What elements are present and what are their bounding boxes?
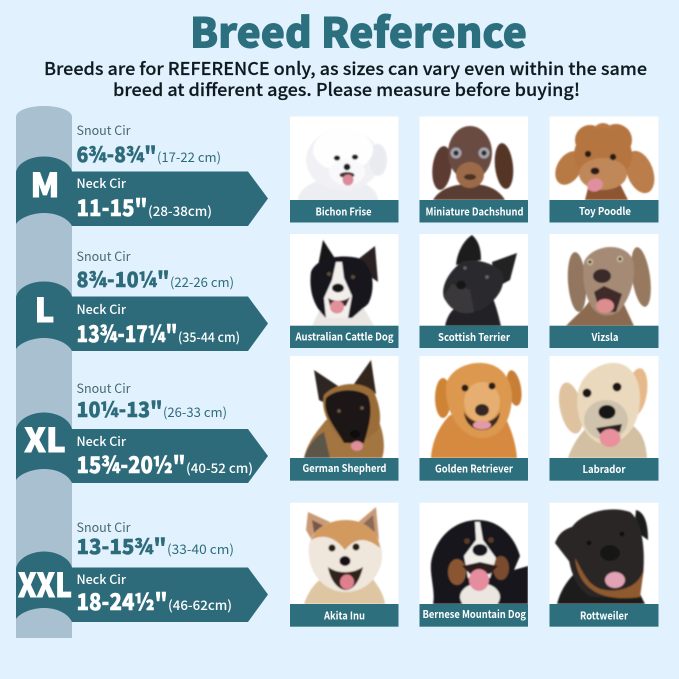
card: Golden Retriever (420, 356, 528, 481)
XL badge letter: XL (24, 414, 66, 462)
XL neck measurement (76, 431, 253, 480)
L size badge and neck arrow (16, 282, 268, 351)
M neck measurement: 11-15" (76, 189, 148, 223)
subtitle: Breeds are for REFERENCE only, as sizes can vary even within the same (44, 56, 647, 81)
card: Rottweiler (550, 503, 658, 627)
L neck measurement: 13¾-17¼" (76, 315, 178, 349)
XL neck measurement: Neck Cir (76, 431, 127, 450)
size column track (16, 106, 72, 638)
XL snout measurement: Snout Cir (76, 378, 131, 397)
label: Toy Poodle: Toy Poodle (579, 204, 631, 219)
M snout measurement: 6¾-8¾" (76, 139, 156, 169)
card: Australian Cattle Dog (290, 234, 398, 348)
label: Rottweiler: Rottweiler (580, 608, 628, 624)
label: Bichon Frise: Bichon Frise (316, 204, 372, 220)
dog: Toy Poodle (550, 123, 660, 200)
XXL badge letter: XXL (18, 559, 72, 607)
dog: Akita Inu (304, 507, 385, 604)
card: Labrador (550, 356, 658, 481)
M badge letter: M (31, 159, 59, 207)
XL snout measurement: 10¼-13" (76, 394, 162, 424)
dog: Vizsla (566, 246, 654, 326)
dog: Bernese Mountain Dog (431, 520, 528, 611)
label: Golden Retriever: Golden Retriever (435, 462, 513, 476)
M neck measurement (76, 173, 212, 223)
L snout measurement: 8¾-10¼" (76, 264, 170, 294)
L neck measurement: Neck Cir (76, 299, 127, 318)
XXL size badge and neck arrow (16, 552, 268, 622)
card: Akita Inu (290, 503, 398, 627)
subtitle (44, 56, 647, 102)
label: Bernese Mountain Dog: Bernese Mountain Dog (422, 607, 527, 622)
dog: Miniature Dachshund (430, 126, 515, 200)
label: Scottish Terrier: Scottish Terrier (438, 330, 510, 345)
card: Vizsla (550, 234, 658, 348)
XXL snout measurement (76, 517, 234, 561)
M size badge and neck arrow (16, 156, 268, 226)
dog: Bichon Frise (298, 140, 387, 200)
L snout measurement: (22-26 cm) (170, 272, 234, 291)
card: Scottish Terrier (420, 234, 528, 348)
M neck measurement: Neck Cir (76, 173, 127, 192)
card: Bichon Frise (290, 116, 398, 222)
L badge letter: L (35, 284, 54, 332)
dog: German Shepherd (304, 360, 384, 458)
title: Breed Reference (190, 0, 527, 60)
label: Miniature Dachshund: Miniature Dachshund (426, 204, 524, 220)
label: Vizsla: Vizsla (591, 330, 618, 345)
card: German Shepherd (290, 356, 398, 481)
dog: Rottweiler (555, 509, 648, 604)
label: Akita Inu: Akita Inu (323, 608, 365, 624)
XL size badge and neck arrow (16, 412, 268, 483)
label: Labrador: Labrador (582, 462, 626, 477)
size panel: XXL (16, 517, 268, 622)
card: Miniature Dachshund (420, 116, 528, 222)
card: Bernese Mountain Dog (420, 503, 528, 627)
L neck measurement (76, 299, 240, 349)
XXL neck measurement: (46-62cm) (168, 595, 232, 614)
L snout measurement: Snout Cir (76, 246, 131, 265)
dog: Golden Retriever (431, 363, 524, 458)
size panel: M (16, 120, 268, 226)
XXL neck measurement: 18-24½" (76, 583, 168, 617)
subtitle: breed at different ages. Please measure before buying! (113, 77, 580, 102)
XL snout measurement (76, 378, 227, 424)
M snout measurement: (17-22 cm) (157, 147, 221, 166)
size panel: XL (16, 378, 268, 483)
size panel: L (16, 246, 268, 351)
XXL neck measurement (76, 569, 232, 617)
XL snout measurement: (26-33 cm) (163, 402, 227, 421)
L snout measurement (76, 246, 234, 294)
dog: Scottish Terrier (443, 235, 517, 326)
XXL snout measurement: (33-40 cm) (167, 539, 234, 558)
L neck measurement: (35-44 cm) (178, 327, 240, 346)
XL neck measurement: 15¾-20½" (76, 446, 186, 480)
M snout measurement: Snout Cir (76, 120, 131, 139)
XXL snout measurement: 13-15¾" (76, 531, 166, 561)
card: Toy Poodle (550, 116, 660, 222)
dog: Australian Cattle Dog (310, 240, 378, 326)
label: Australian Cattle Dog: Australian Cattle Dog (295, 330, 394, 344)
M snout measurement (76, 120, 221, 169)
XXL neck measurement: Neck Cir (76, 569, 127, 588)
label: German Shepherd: German Shepherd (302, 461, 386, 476)
XXL snout measurement: Snout Cir (76, 517, 131, 536)
XL neck measurement: (40-52 cm) (186, 458, 253, 477)
M neck measurement: (28-38cm) (148, 201, 212, 220)
dog: Labrador (555, 363, 650, 458)
